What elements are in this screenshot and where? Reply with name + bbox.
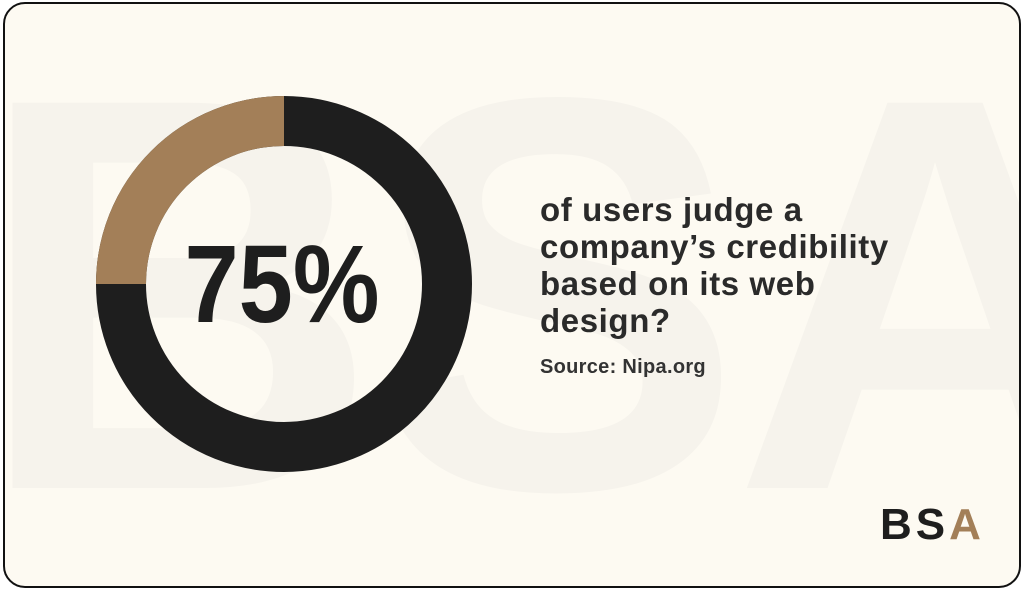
statement text: company’s credibility <box>540 228 889 265</box>
source: Source: Nipa.org <box>540 356 706 378</box>
statement text: based on its web <box>540 265 816 302</box>
statement text: design? <box>540 302 671 339</box>
statement text: of users judge a <box>540 191 803 228</box>
donut chart: 75% <box>184 223 380 346</box>
statement text <box>540 191 889 339</box>
logo: BSA <box>880 500 985 549</box>
